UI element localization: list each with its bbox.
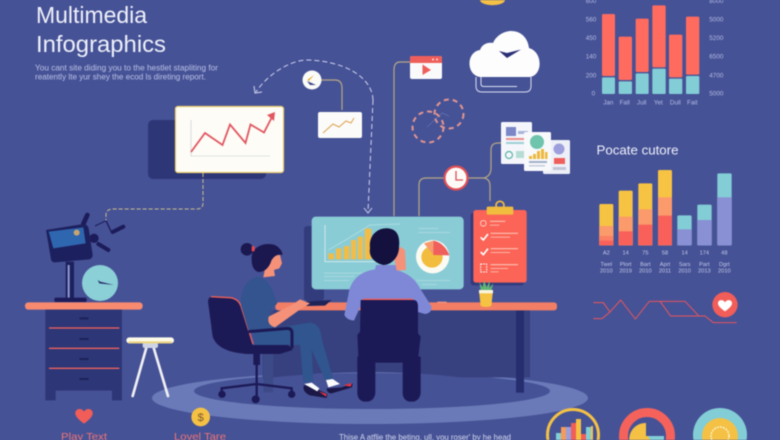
woman hair <box>252 244 282 272</box>
office scene <box>208 201 557 403</box>
top right stacked bar chart: 4700 <box>709 73 724 80</box>
tablet <box>304 300 332 306</box>
man shirt <box>344 265 432 321</box>
top right stacked bar chart: 6500 <box>709 53 724 60</box>
document 2 <box>543 140 570 174</box>
man hand <box>394 247 406 271</box>
top right stacked bar chart: 5000 <box>709 16 724 23</box>
plant pot <box>479 280 493 307</box>
axis labels: 2011 <box>659 269 671 275</box>
dresser with camera and clock <box>25 215 210 426</box>
axis labels: Dgrt <box>719 262 730 268</box>
woman chair back <box>208 297 293 354</box>
clipboard <box>471 201 527 285</box>
top right stacked bar chart: Jan <box>603 100 614 107</box>
coin icon: $ <box>198 412 205 424</box>
axis labels: 2010 <box>600 269 613 275</box>
axis labels: 2010 <box>678 269 691 275</box>
woman face <box>263 255 282 277</box>
axis labels: 75 <box>642 250 648 256</box>
cool bars <box>677 173 732 245</box>
top right stacked bar chart: 140 <box>586 53 597 60</box>
title: Multimedia <box>36 2 147 28</box>
bottom icon: bar chart ring <box>548 410 598 440</box>
desk top <box>275 302 557 310</box>
chart card <box>148 106 284 179</box>
heart icon <box>75 409 93 424</box>
axis labels: 14 <box>623 250 629 256</box>
axis labels: Aprt <box>660 262 671 268</box>
axis labels: 58 <box>662 250 668 256</box>
top right stacked bar chart: 200 <box>586 73 597 80</box>
man head <box>370 228 399 265</box>
dashed connector from camera to chart card <box>106 173 203 221</box>
axis labels: Twel <box>601 262 612 268</box>
top right stacked bar chart: Jull <box>637 100 646 107</box>
desk legs <box>263 310 524 393</box>
dresser body <box>45 310 122 400</box>
man legs <box>357 357 421 402</box>
wall clock <box>82 265 118 301</box>
woman arm <box>268 299 310 327</box>
document 3 <box>524 132 551 171</box>
warm bars <box>599 170 672 245</box>
middle right bar chart <box>593 170 738 323</box>
top right stacked bar chart: Fait <box>687 100 698 107</box>
axis labels: 14 <box>682 250 688 256</box>
top right stacked bar chart <box>586 0 724 107</box>
title: Infographics <box>36 31 166 57</box>
axis labels: 174 <box>700 250 709 256</box>
side table <box>126 337 174 396</box>
top yellow badge <box>480 0 505 5</box>
intro text: You cant site diding you to the hestlet stapliting for <box>35 64 218 72</box>
top right stacked bar chart: 560 <box>586 16 597 23</box>
top right stacked bar chart: Dull <box>670 100 681 107</box>
right chart heading: Pocate cutore <box>596 142 678 158</box>
hand on desk <box>437 302 447 303</box>
woman torso <box>241 277 277 331</box>
woman shoes <box>303 383 353 398</box>
axis labels: 2010 <box>639 269 652 275</box>
top right stacked bar chart: 450 <box>586 35 597 42</box>
dashed circles <box>412 100 464 142</box>
cloud icon <box>470 31 540 92</box>
clock with connectors <box>419 143 502 216</box>
monitor <box>304 217 464 301</box>
woman legs <box>253 323 333 383</box>
document cards <box>501 122 570 174</box>
axis labels: 2019 <box>619 269 632 275</box>
axis labels: 48 <box>721 250 727 256</box>
dashed arc arrow to chart card <box>254 60 373 213</box>
axis labels: Plort <box>620 262 632 268</box>
bottom icon: sun badge <box>693 408 747 440</box>
woman <box>241 243 353 398</box>
video player <box>394 56 442 216</box>
axis labels: Bart <box>640 262 651 268</box>
man chair <box>357 300 421 363</box>
floor <box>152 372 588 424</box>
top right stacked bar chart: 5000 <box>709 91 724 98</box>
top right stacked bar chart: Fall <box>620 100 630 107</box>
axis labels: Part <box>699 262 710 268</box>
document 1 <box>501 122 532 164</box>
axis labels: A2 <box>603 250 610 256</box>
woman chair arm and base <box>218 328 295 403</box>
axis labels: Sars <box>679 262 691 268</box>
intro text <box>35 64 218 82</box>
intro text: reatently lte yur shey the ecod ls direting report. <box>35 72 206 82</box>
top right stacked bar chart: 5200 <box>709 35 724 42</box>
axis labels: 2013 <box>698 269 711 275</box>
top right stacked bar chart: 0 <box>592 91 596 98</box>
line and heart badge <box>593 292 738 323</box>
small trend card with node <box>302 70 362 138</box>
top right stacked bar chart: Yet <box>654 100 663 107</box>
camera <box>46 215 124 302</box>
axis labels: 2010 <box>718 269 731 275</box>
bottom icon: pie ring <box>624 412 670 440</box>
man <box>344 228 432 402</box>
dresser top <box>25 302 143 310</box>
coin icon <box>191 408 210 426</box>
desk back panel <box>263 310 530 378</box>
axis labels <box>600 250 731 275</box>
title <box>36 2 166 57</box>
